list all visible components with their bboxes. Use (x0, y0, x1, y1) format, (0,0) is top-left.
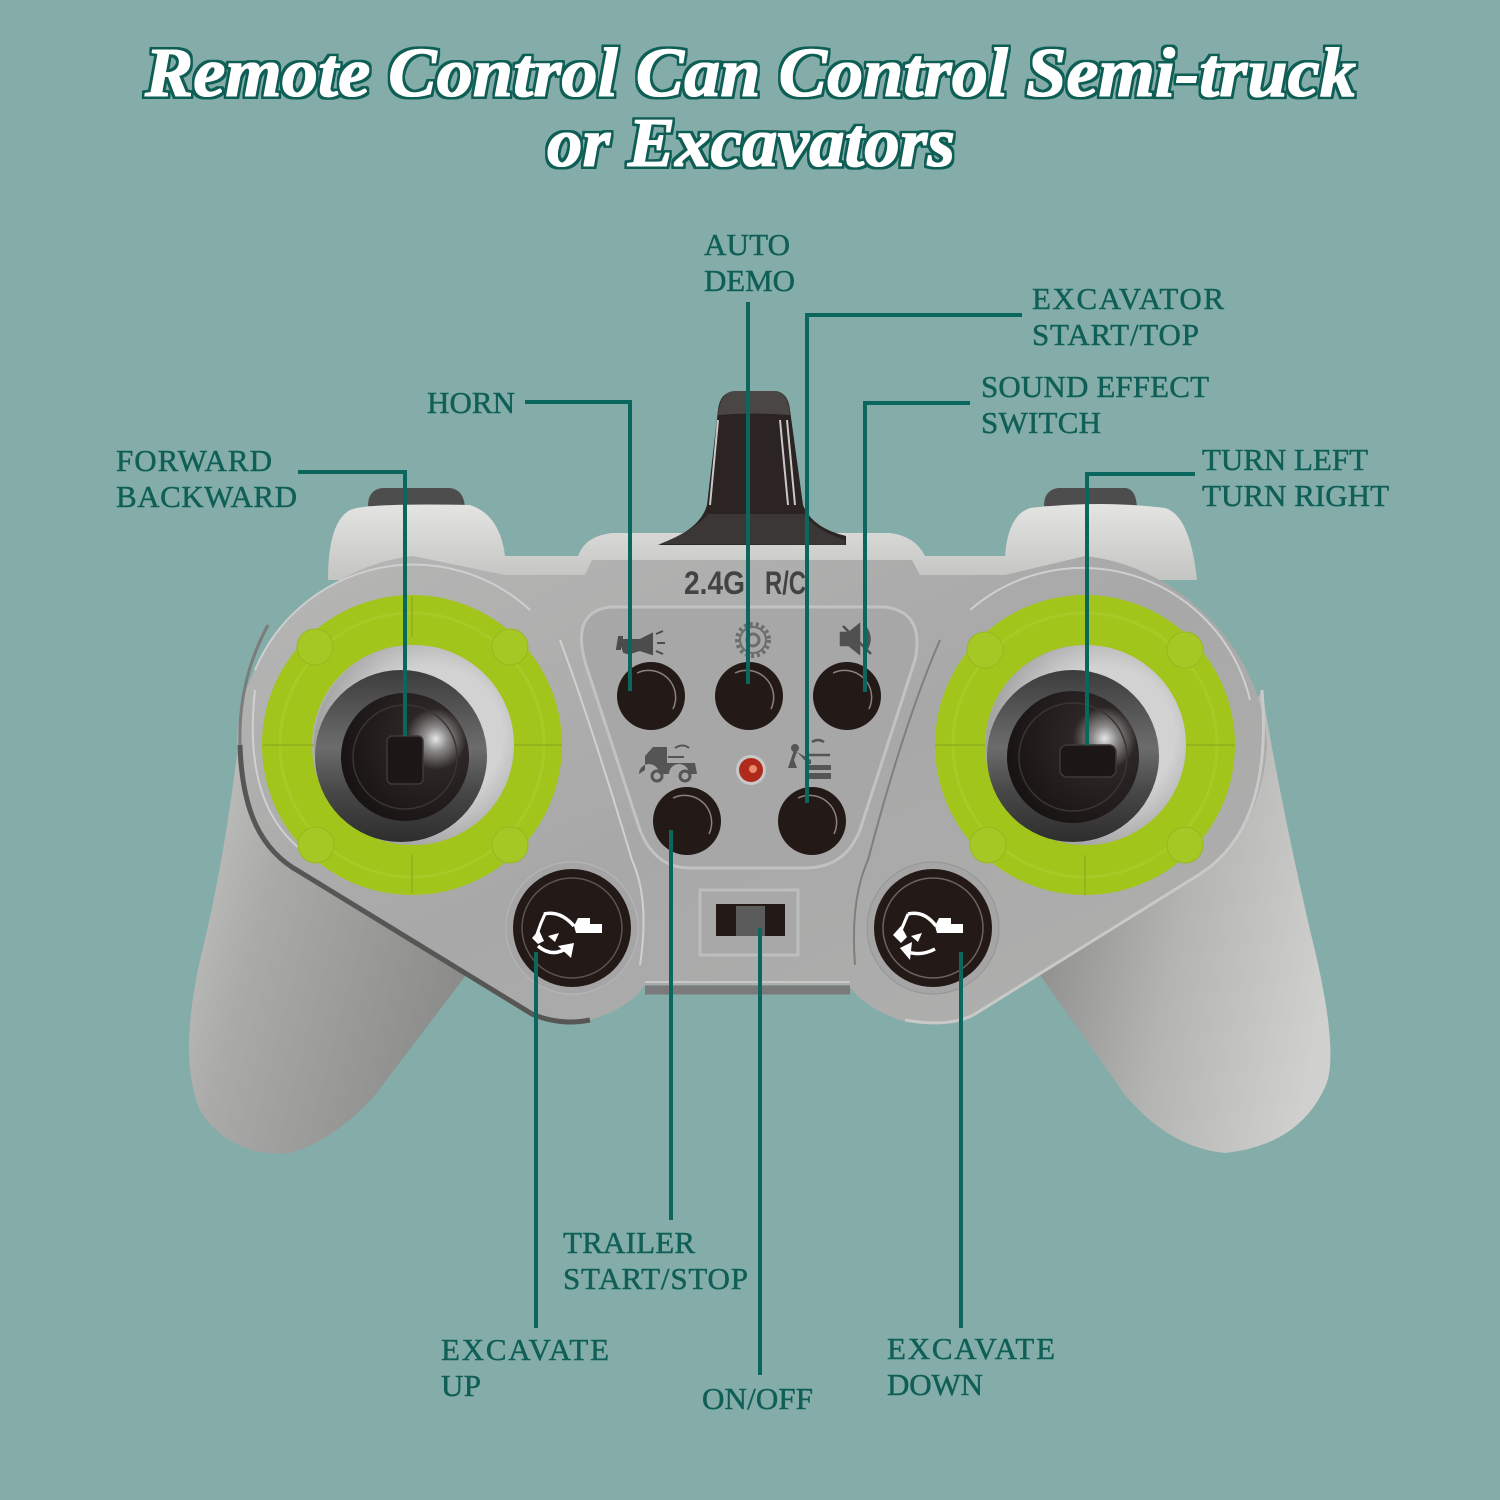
label: horn (427, 385, 630, 691)
label: sound effect switch (865, 369, 1209, 692)
button panel (581, 607, 917, 868)
green ring (960, 620, 1210, 870)
right grip (1040, 690, 1330, 1153)
label: excavate down: DOWN (887, 1367, 983, 1402)
label: on/off: ON/OFF (702, 1381, 813, 1416)
label: excavator start/top (807, 281, 1224, 803)
controller (189, 391, 1330, 1153)
buttons (617, 662, 881, 855)
label: auto demo: DEMO (704, 263, 795, 298)
label: auto demo (704, 227, 795, 684)
label: excavate up: UP (441, 1368, 481, 1403)
2.4G R/C label: 2.4G (684, 565, 745, 601)
icon: horn (617, 631, 665, 654)
title: Remote Control Can Control Semi-truck (144, 35, 1356, 112)
label: forward backward: FORWARD (116, 443, 272, 478)
label: excavator start/top: START/TOP (1032, 317, 1199, 352)
label: excavator start/top: EXCAVATOR (1032, 281, 1224, 316)
shoulder buttons (368, 488, 1137, 510)
green ring (287, 620, 537, 870)
icon: excavator small (788, 740, 831, 779)
left joystick (263, 597, 562, 893)
face plate (237, 556, 1267, 1024)
label: turn left turn right (1087, 442, 1389, 745)
face edge shading (240, 565, 1263, 1023)
antenna (658, 391, 846, 545)
label: sound effect switch: SOUND EFFECT (981, 369, 1209, 404)
label: trailer start/stop: START/STOP (563, 1261, 748, 1296)
label: horn: HORN (427, 385, 515, 420)
LED indicator (736, 755, 766, 785)
label: excavate up (441, 952, 609, 1403)
label: trailer start/stop (563, 830, 748, 1296)
title: or Excavators (547, 105, 955, 182)
left grip (189, 730, 470, 1153)
2.4G R/C label (684, 565, 806, 601)
label: trailer start/stop: TRAILER (563, 1225, 695, 1260)
icon: excavator white (532, 913, 602, 958)
label: auto demo: AUTO (704, 227, 790, 262)
icon: sound mute (841, 625, 871, 654)
right joystick (935, 613, 1235, 895)
upper housing (328, 504, 1197, 580)
label: excavate down: EXCAVATE (887, 1331, 1055, 1366)
icon: gear (737, 624, 769, 656)
label: excavate up: EXCAVATE (441, 1332, 609, 1367)
icon: truck (639, 746, 697, 781)
power switch (700, 890, 798, 955)
2.4G R/C label: R/C (765, 565, 806, 601)
label: turn left turn right: TURN LEFT (1202, 442, 1368, 477)
label: turn left turn right: TURN RIGHT (1202, 478, 1389, 513)
label: excavate down (887, 952, 1055, 1402)
label: forward backward: BACKWARD (116, 479, 297, 514)
lower right button (867, 862, 999, 994)
title (144, 35, 1356, 182)
lower left button (506, 862, 638, 994)
label: forward backward (116, 443, 405, 736)
label: sound effect switch: SWITCH (981, 405, 1101, 440)
icon: excavator white (893, 913, 963, 960)
